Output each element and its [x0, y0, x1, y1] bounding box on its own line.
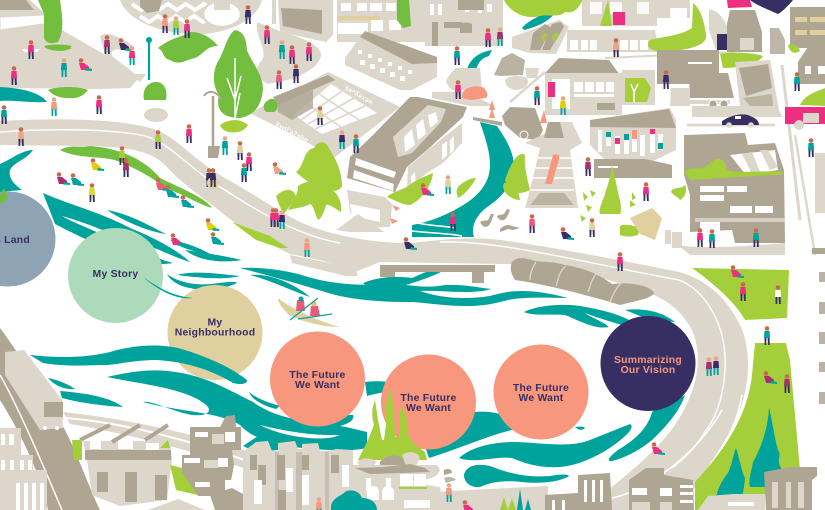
label: my story: My Story: [93, 269, 138, 280]
building bottom left buses: [0, 328, 100, 510]
buildings: bottom left tower: [0, 428, 47, 510]
road: lower bay path: [63, 412, 410, 490]
label: my neighbourhood: Neighbourhood: [175, 328, 255, 338]
building: large curved block: [336, 97, 467, 232]
people: along the promenade: [155, 124, 310, 257]
navy and pink top right items: [727, 0, 793, 14]
plaza: paved square with grid: [250, 72, 400, 157]
label: future 1: The Future: [289, 370, 346, 381]
lamp posts: [146, 37, 222, 158]
kayak with paddlers: [278, 296, 340, 327]
building: top centre apartment: [337, 0, 425, 42]
plaza: cafe terrace: [257, 22, 321, 84]
label: future 1: We Want: [295, 380, 340, 391]
pier and rocks: [380, 258, 654, 305]
circle: The Future We Want 2: [381, 354, 476, 450]
plaza: top-left square: [0, 0, 146, 89]
rocks under conifers: [357, 452, 420, 468]
market stall: [648, 0, 706, 52]
building behind truck with tree: [622, 50, 763, 105]
traffic cones: [489, 100, 547, 123]
river: strands over upper circles: [143, 277, 193, 298]
circle: My Story: [68, 228, 163, 323]
rock garden bed: [692, 60, 782, 117]
right edge blocks: [812, 153, 825, 404]
road: street lines on right: [510, 52, 815, 255]
buildings: bottom row: [243, 441, 353, 510]
label: future 3: The Future: [513, 383, 569, 394]
green trees: plaza: [44, 30, 277, 118]
building: kiosk on paved square: [273, 75, 335, 120]
place name: north: šxʷƛ̓exən: [343, 84, 375, 107]
car orange: [462, 86, 487, 100]
people: top streets: [454, 27, 814, 157]
circle: My Neighbourhood: [168, 285, 262, 380]
planter: [144, 82, 168, 122]
building: arched-window hall: [353, 464, 456, 510]
large green-roof building: [630, 133, 785, 255]
label: future 2: We Want: [406, 403, 451, 414]
people: beach: [57, 146, 224, 246]
label: summarizing: Our Vision: [621, 365, 675, 376]
river: lower bands: [30, 346, 685, 487]
buildings: top-left row: [0, 0, 72, 66]
circle: The Future We Want 1: [270, 332, 365, 426]
buildings: row houses: [72, 425, 198, 506]
buildings: bottom right blocks: [545, 467, 817, 510]
building: cafe pavilion: [272, 0, 333, 42]
buildings: cubic block: [148, 415, 258, 510]
shop with large windows: [545, 58, 622, 115]
bush: teal: [331, 490, 377, 510]
path: curving seawall promenade: [0, 119, 748, 510]
park: lower right lawn: [695, 343, 800, 510]
tree: lime conifer and leaves: [580, 165, 640, 236]
icon: conifer trees over the circle: [358, 387, 427, 460]
geese: [480, 209, 520, 232]
pink bus: [785, 107, 825, 130]
rocks and wagon: [432, 53, 539, 106]
path: promenade bottom: [430, 486, 548, 510]
people: cyclist on right and walkers: [316, 252, 790, 510]
people: cyclist pair and skater: [18, 127, 276, 227]
trucks and depot: [709, 10, 785, 54]
people: fountain square: [162, 5, 359, 153]
green hedge top centre: [504, 0, 583, 17]
label: future 2: The Future: [400, 393, 457, 404]
river: stream into the bay: [412, 4, 558, 237]
garden beds: [512, 20, 569, 54]
building: roofed block: [345, 31, 437, 90]
label: future 3: We Want: [518, 393, 564, 404]
people: by the river mouth: [404, 157, 759, 250]
colourful facade building: [590, 108, 676, 178]
truck: dump truck: [670, 73, 734, 108]
place name: south: Xwtl'a7shn: [274, 121, 310, 144]
label: summarizing: Summarizing: [614, 355, 682, 366]
lime palms on water edge: [0, 154, 530, 204]
lime beach shoreline: [60, 146, 212, 208]
circle: The Future We Want 3: [494, 344, 588, 440]
label: my neighbourhood: My: [208, 318, 222, 328]
truck: delivery van: [473, 107, 543, 140]
icon: teal conifers: [716, 407, 783, 500]
circle: Summarizing Our Vision: [600, 316, 696, 411]
river: central channels: [240, 268, 675, 328]
circle: land: [0, 192, 56, 286]
police car: [722, 114, 759, 128]
right top buildings: [788, 7, 825, 106]
river: upper left channels: [0, 87, 242, 290]
plaza: checker fountain square: [120, 0, 262, 34]
people: top left plaza: [1, 35, 135, 124]
gazebo with salmon fire: [525, 122, 582, 208]
small trees by bottom path: [500, 489, 531, 510]
building: top row houses: [425, 0, 503, 46]
school building: [567, 0, 659, 52]
lime bushes and palms: [220, 120, 342, 248]
park: upper right lawn: [692, 268, 789, 320]
